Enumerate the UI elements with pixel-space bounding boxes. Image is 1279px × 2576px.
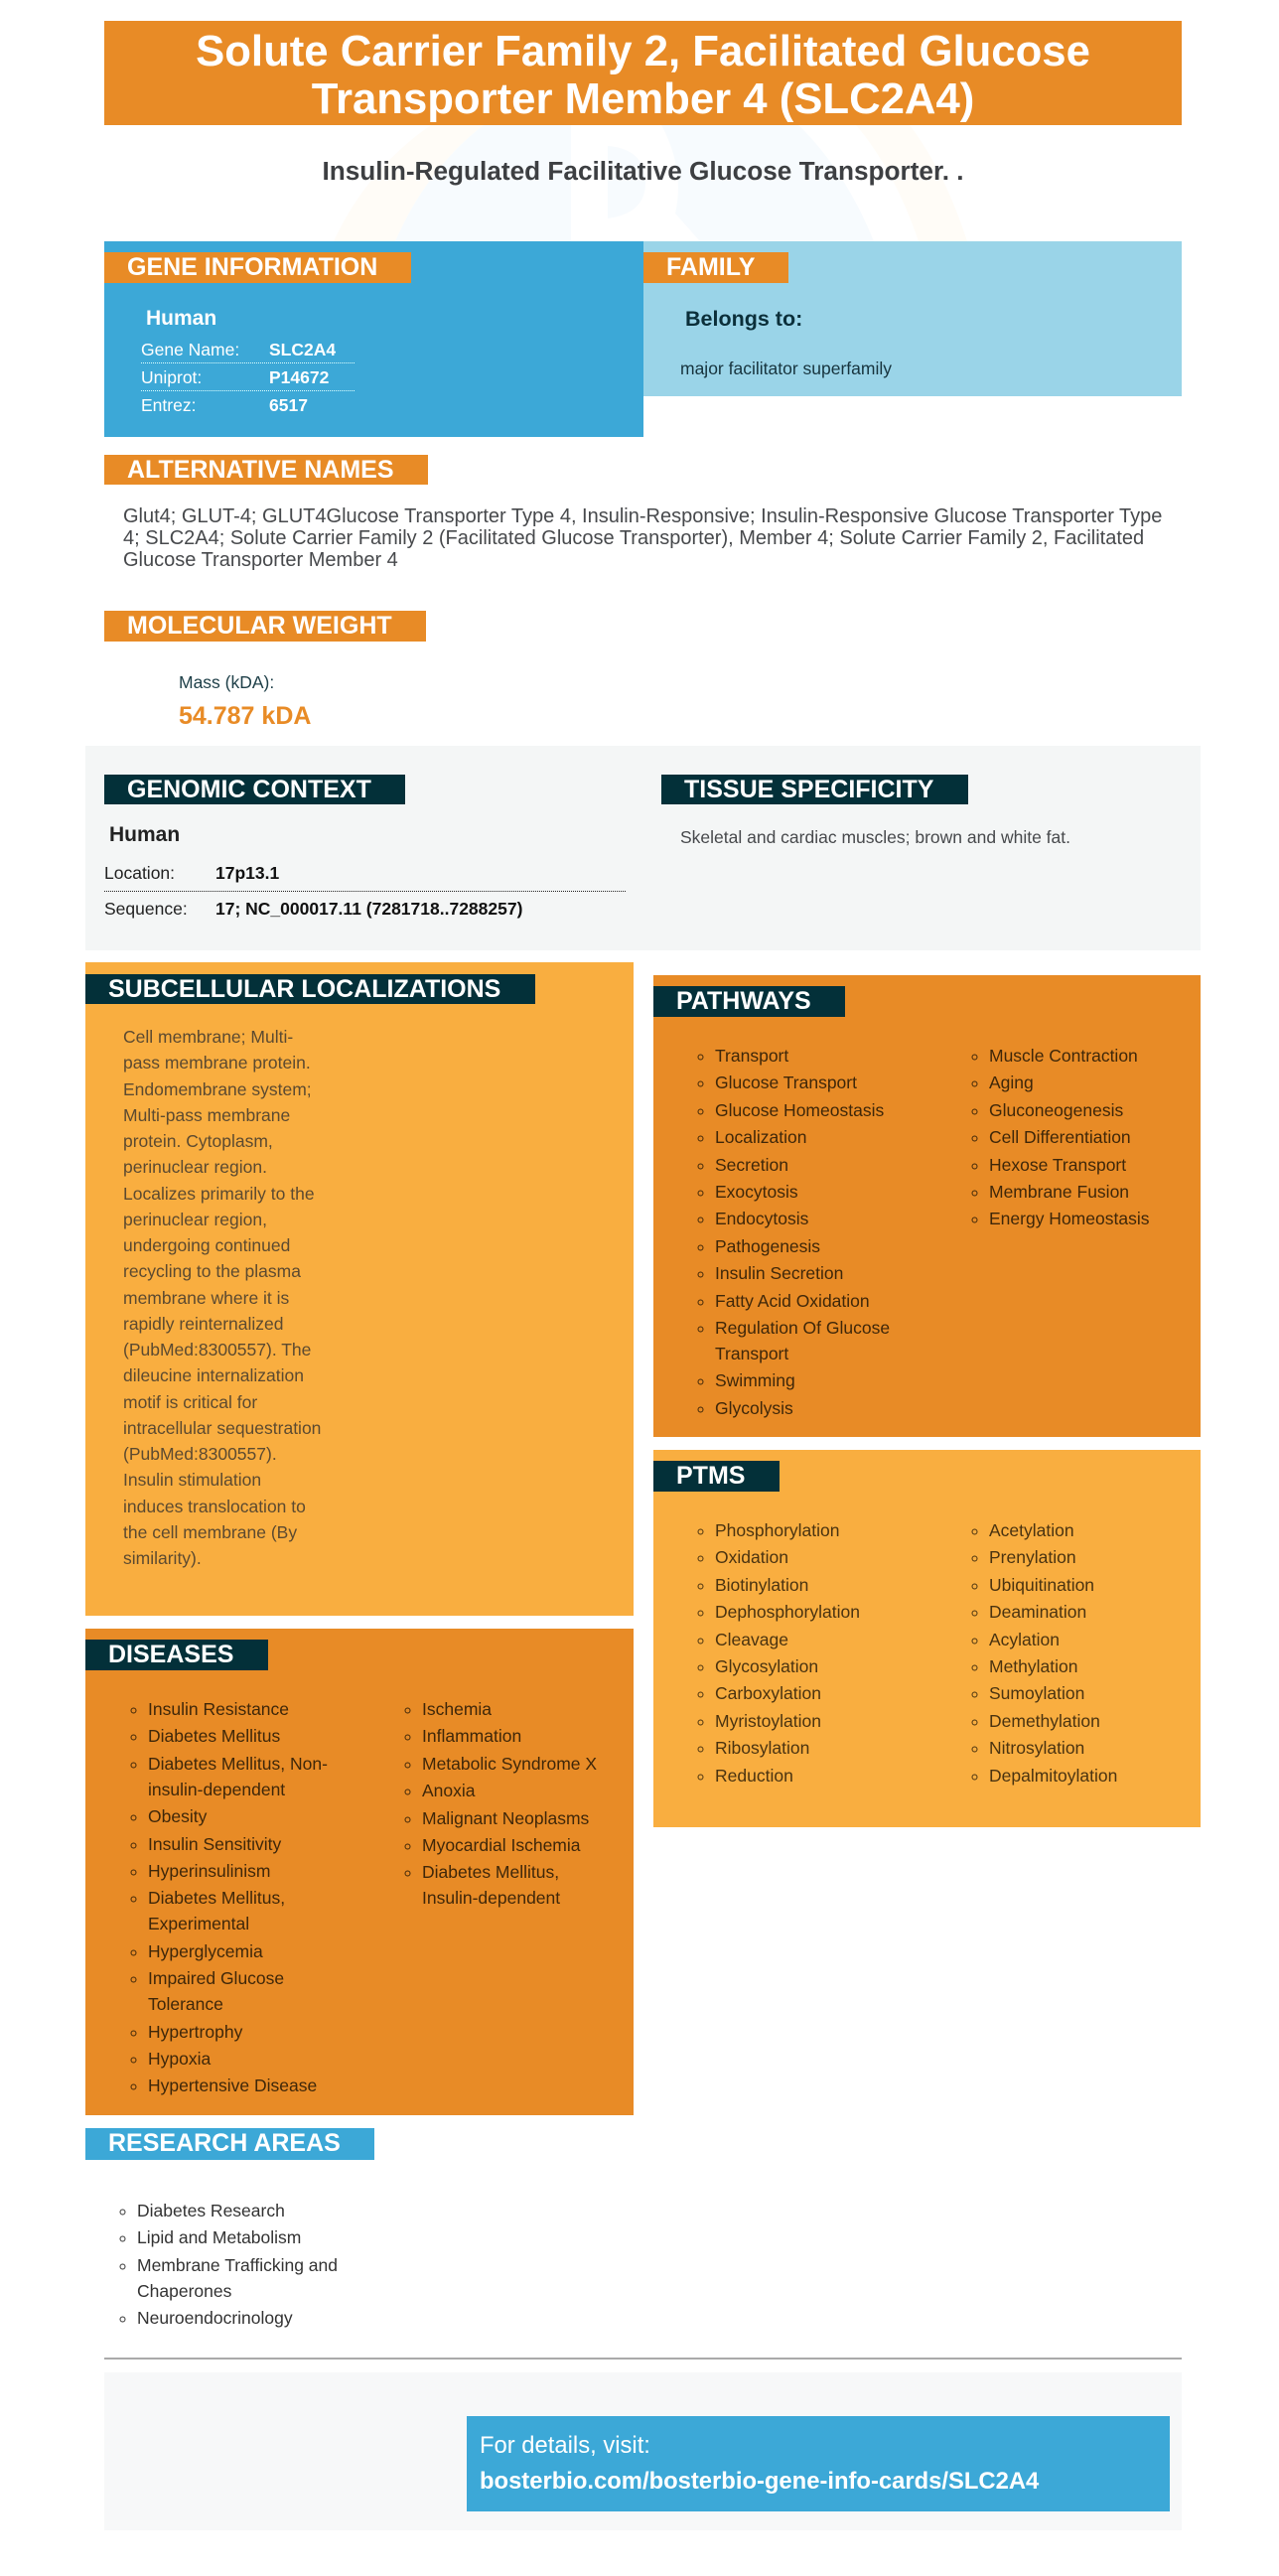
row: sequence <box>104 899 522 919</box>
row: uniprot: Uniprot: <box>141 367 202 387</box>
subtitle: Insulin-Regulated Facilitative Glucose Transporter. . <box>322 156 964 186</box>
localization text <box>123 1027 321 1568</box>
list: diseases column 2 <box>405 1699 597 1908</box>
list: pathways column 2: Membrane Fusion <box>989 1182 1129 1202</box>
heading: subcellular localizations: SUBCELLULAR LOCALIZATIONS <box>108 975 500 1003</box>
mass value: 54.787 kDA <box>179 702 311 730</box>
list: ptms column 1: Phosphorylation <box>715 1520 840 1540</box>
heading: research areas: RESEARCH AREAS <box>108 2129 341 2157</box>
list: ptms column 2: Depalmitoylation <box>989 1766 1117 1786</box>
list: pathways column 1: Pathogenesis <box>715 1236 820 1256</box>
list: ptms column 1: Carboxylation <box>715 1683 821 1703</box>
list: diseases column 2: Metabolic Syndrome X <box>422 1754 597 1774</box>
family value: major facilitator superfamily <box>680 358 892 378</box>
heading: pathways: PATHWAYS <box>676 987 811 1015</box>
list: pathways column 1: Endocytosis <box>715 1209 808 1228</box>
heading: family <box>643 252 788 283</box>
heading: family: FAMILY <box>666 253 755 281</box>
list: ptms column 2: Demethylation <box>989 1711 1100 1731</box>
list: diseases column 1: Hyperinsulinism <box>148 1861 271 1881</box>
list: diseases column 1: Obesity <box>148 1806 207 1826</box>
list: pathways column 2: Gluconeogenesis <box>989 1100 1123 1120</box>
list: diseases column 2: Inflammation <box>422 1726 521 1746</box>
heading: ptms: PTMS <box>676 1462 745 1490</box>
tissue specificity text: Skeletal and cardiac muscles; brown and white fat. <box>680 827 1070 847</box>
row: uniprot: P14672 <box>269 367 329 387</box>
list: research areas: Diabetes Research <box>137 2201 285 2220</box>
list: pathways column 1: Fatty Acid Oxidation <box>715 1291 870 1311</box>
localization text: recycling to the plasma <box>123 1261 301 1281</box>
heading: tissue specificity: TISSUE SPECIFICITY <box>684 776 933 803</box>
list: pathways column 1: Regulation Of Glucose Transport <box>715 1318 890 1363</box>
list: diseases column 2: Insulin-dependent <box>422 1888 560 1908</box>
list: ptms column 1: Dephosphorylation <box>715 1602 860 1622</box>
list: pathways column 2: Cell Differentiation <box>989 1127 1131 1147</box>
list: diseases column 1: Diabetes Mellitus, Experimental <box>148 1888 285 1933</box>
panel: gene information <box>104 241 643 437</box>
row: location: Location: <box>104 863 175 883</box>
localization text: Insulin stimulation <box>123 1470 261 1490</box>
localization text: (PubMed:8300557). The <box>123 1340 311 1360</box>
list: ptms column 2: Ubiquitination <box>989 1575 1094 1595</box>
row: uniprot <box>141 367 355 391</box>
list: diseases column 2: Ischemia <box>422 1699 492 1719</box>
localization text: dileucine internalization <box>123 1365 304 1385</box>
localization text: the cell membrane (By <box>123 1522 297 1542</box>
row: entrez: 6517 <box>269 395 308 415</box>
localization text: undergoing continued <box>123 1235 290 1255</box>
list: pathways column 1: Localization <box>715 1127 806 1147</box>
list: ptms column 1: Myristoylation <box>715 1711 821 1731</box>
list: diseases column 1: Impaired Glucose Tolerance <box>148 1968 284 2014</box>
list: pathways column 1: Glycolysis <box>715 1398 793 1418</box>
localization text: Cell membrane; Multi- <box>123 1027 293 1047</box>
list: diseases column 1: Diabetes Mellitus, Non-insulin-dependent <box>148 1754 328 1799</box>
panel: subcellular localizations <box>85 962 634 1616</box>
list: ptms column 2: Acetylation <box>989 1520 1074 1540</box>
panel: genomic context and tissue specificity: 17; NC_000017.11 (7281718..7288257) <box>215 899 522 919</box>
callout text: bosterbio.com/bosterbio-gene-info-cards/SLC2A4 <box>480 2468 1039 2495</box>
title banner: Transporter Member 4 (SLC2A4) <box>312 74 974 123</box>
alternative names text: Glut4; GLUT-4; GLUT4Glucose Transporter Type 4, Insulin-Responsive; Insulin-Responsive Glucose Transporter Type 4; SLC2A4; Solute Carrier Family 2 (Facilitated Glucose Transporter), Member 4; Solute Carrier Family 2, Facilitated Glucose Transporter Member 4 <box>123 505 1162 571</box>
localization text: pass membrane protein. <box>123 1053 311 1073</box>
list: diseases column 2: Anoxia <box>422 1781 476 1800</box>
localization text: perinuclear region. <box>123 1157 267 1177</box>
list: ptms column 1: Glycosylation <box>715 1656 818 1676</box>
localization text: intracellular sequestration <box>123 1418 321 1438</box>
list: pathways column 2: Muscle Contraction <box>989 1046 1138 1066</box>
heading: ptms <box>653 1461 780 1492</box>
list: ptms column 1: Reduction <box>715 1766 793 1786</box>
list: ptms column 2: Deamination <box>989 1602 1086 1622</box>
footer rule <box>104 2358 1182 2360</box>
list: pathways column 1 <box>697 1046 890 1418</box>
list: pathways column 1: Swimming <box>715 1370 795 1390</box>
list: pathways column 2 <box>971 1046 1149 1228</box>
panel: diseases <box>85 1629 634 2115</box>
list: pathways column 2: Energy Homeostasis <box>989 1209 1149 1228</box>
title banner <box>104 21 1182 125</box>
background watermark logo <box>0 125 1279 241</box>
heading: diseases <box>85 1640 268 1670</box>
list: ptms column 1 <box>697 1520 860 1786</box>
heading: diseases: DISEASES <box>108 1641 233 1668</box>
list: research areas: Neuroendocrinology <box>137 2308 293 2328</box>
localization text: Endomembrane system; <box>123 1078 312 1098</box>
row: location: 17p13.1 <box>215 863 279 883</box>
heading: genomic context: GENOMIC CONTEXT <box>127 776 371 803</box>
list: diseases column 1: Insulin Resistance <box>148 1699 289 1719</box>
localization text: motif is critical for <box>123 1392 257 1412</box>
list: pathways column 2: Aging <box>989 1073 1034 1092</box>
localization text: Localizes primarily to the <box>123 1184 315 1204</box>
list: pathways column 1: Exocytosis <box>715 1182 798 1202</box>
list: ptms column 1: Ribosylation <box>715 1738 809 1758</box>
list: diseases column 1: Hypoxia <box>148 2049 211 2069</box>
list: ptms column 2: Nitrosylation <box>989 1738 1084 1758</box>
list: ptms column 1: Biotinylation <box>715 1575 808 1595</box>
list: ptms column 1: Oxidation <box>715 1547 788 1567</box>
localization text: membrane where it is <box>123 1287 289 1307</box>
list: diseases column 1: Diabetes Mellitus <box>148 1726 280 1746</box>
list: pathways column 1: Secretion <box>715 1155 788 1175</box>
list: diseases column 1 <box>131 1699 328 2095</box>
list: ptms column 2: Prenylation <box>989 1547 1076 1567</box>
localization text: similarity). <box>123 1548 202 1568</box>
species: human: Human <box>146 307 216 330</box>
callout text <box>480 2432 1039 2495</box>
belongs to label: Belongs to: <box>685 307 802 331</box>
list: ptms column 2: Methylation <box>989 1656 1078 1676</box>
list: pathways column 2: Hexose Transport <box>989 1155 1126 1175</box>
list: diseases column 2: Malignant Neoplasms <box>422 1808 589 1828</box>
heading: molecular weight: MOLECULAR WEIGHT <box>127 612 392 640</box>
localization text: rapidly reinternalized <box>123 1314 283 1334</box>
list: diseases column 1: Insulin Sensitivity <box>148 1834 281 1854</box>
panel: pathways <box>653 975 1201 1437</box>
heading: gene information: GENE INFORMATION <box>127 253 377 281</box>
list: pathways column 1: Glucose Homeostasis <box>715 1100 884 1120</box>
row: gene name: Gene Name: <box>141 340 239 359</box>
localization text: Multi-pass membrane <box>123 1105 290 1125</box>
list: ptms column 2: Acylation <box>989 1630 1060 1649</box>
title banner: Solute Carrier Family 2, Facilitated Glucose <box>196 27 1090 75</box>
list: diseases column 1: Hypertrophy <box>148 2022 242 2042</box>
heading: pathways <box>653 986 845 1017</box>
row: location <box>104 863 626 892</box>
row: entrez <box>141 395 308 415</box>
row: sequence: Sequence: <box>104 899 188 919</box>
row: gene name <box>141 340 355 363</box>
panel: family <box>643 241 1182 396</box>
panel: ptms <box>653 1450 1201 1827</box>
row: gene name: SLC2A4 <box>269 340 336 359</box>
list: pathways column 1: Insulin Secretion <box>715 1263 843 1283</box>
localization text: perinuclear region, <box>123 1210 267 1229</box>
list: ptms column 2: Sumoylation <box>989 1683 1084 1703</box>
callout: details link <box>467 2416 1170 2511</box>
list: diseases column 2: Diabetes Mellitus, <box>422 1862 559 1882</box>
heading: alternative names: ALTERNATIVE NAMES <box>127 456 394 484</box>
row: entrez: Entrez: <box>141 395 196 415</box>
localization text: induces translocation to <box>123 1496 306 1515</box>
list: research areas <box>119 2201 338 2328</box>
mass label: Mass (kDA): <box>179 672 274 692</box>
localization text: (PubMed:8300557). <box>123 1444 277 1464</box>
list: diseases column 2: Myocardial Ischemia <box>422 1835 580 1855</box>
list: research areas: Membrane Trafficking and Chaperones <box>137 2255 338 2301</box>
list: diseases column 1: Hypertensive Disease <box>148 2075 317 2095</box>
list: diseases column 1: Hyperglycemia <box>148 1941 263 1961</box>
callout text: For details, visit: <box>480 2432 650 2459</box>
list: pathways column 1: Transport <box>715 1046 788 1066</box>
panel: footer <box>104 2372 1182 2530</box>
localization text: protein. Cytoplasm, <box>123 1131 273 1151</box>
list: pathways column 1: Glucose Transport <box>715 1073 857 1092</box>
panel: genomic context and tissue specificity <box>85 746 1201 950</box>
list: ptms column 2 <box>971 1520 1117 1786</box>
list: ptms column 1: Cleavage <box>715 1630 788 1649</box>
species: human: Human <box>109 823 180 846</box>
list: research areas: Lipid and Metabolism <box>137 2227 301 2247</box>
